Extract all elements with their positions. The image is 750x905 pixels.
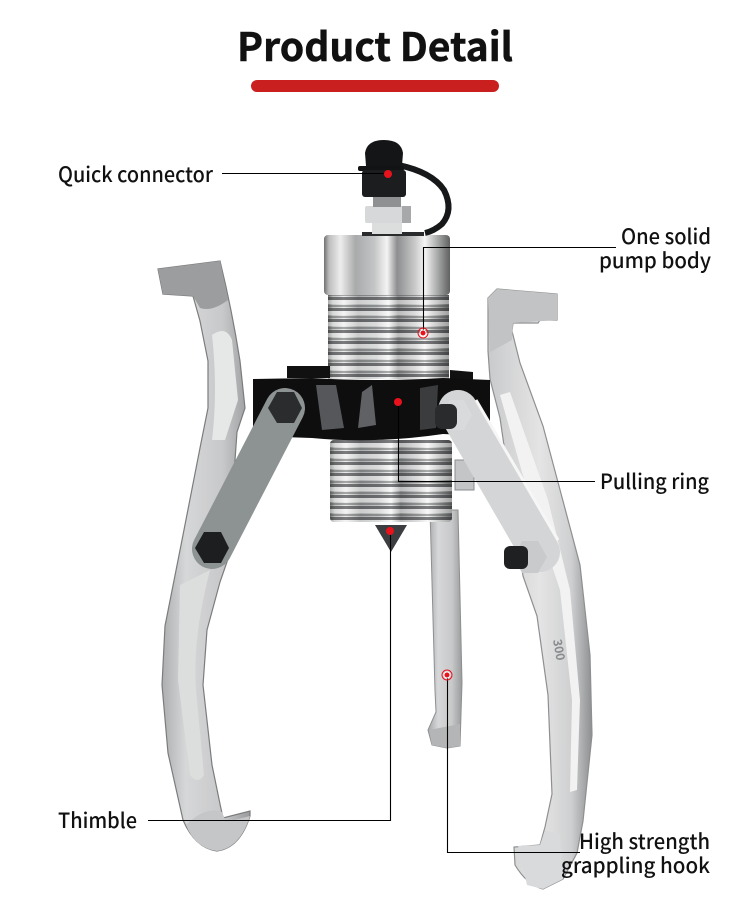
leader line: hook: [448, 675, 580, 852]
label: one solid pump body: [599, 221, 712, 275]
quick connector with cap strap: [358, 140, 449, 236]
thimble: [375, 525, 407, 552]
left link with bolts: [195, 392, 302, 563]
label: one solid pump body: One solid: [621, 221, 711, 251]
leader line: pump body: [424, 248, 616, 333]
leader line: thimble: [148, 531, 390, 820]
leader line: pulling ring: [398, 402, 595, 482]
label: thimble: Thimble: [58, 805, 137, 835]
puller illustration: [158, 140, 592, 889]
label: quick connector: Quick connector: [58, 159, 213, 189]
right jaw: [488, 289, 592, 889]
label: one solid pump body: pump body: [599, 245, 712, 275]
label: high strength grappling hook: [561, 826, 710, 880]
body: cylinder, threads: [324, 235, 452, 522]
pulling ring: [253, 366, 490, 440]
right jaw: 300: [549, 638, 569, 662]
title: Product Detail: [237, 17, 513, 73]
marker dots: [384, 170, 452, 680]
label: high strength grappling hook: High strength: [579, 826, 710, 856]
title underline bar: [251, 80, 499, 92]
left jaw: [158, 261, 250, 851]
right link with bolts: [435, 400, 558, 573]
leader line: quick connector: [222, 172, 387, 174]
label: high strength grappling hook: grappling hook: [561, 850, 710, 880]
middle jaw: [428, 460, 474, 748]
label: pulling ring: Pulling ring: [600, 466, 709, 496]
